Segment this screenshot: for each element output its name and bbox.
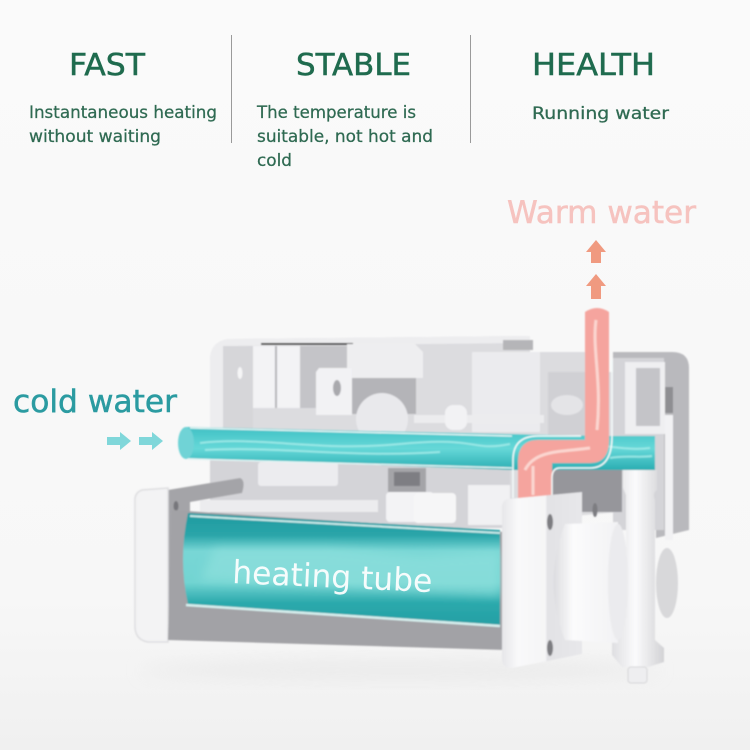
text: fast description: without waiting — [29, 127, 161, 147]
heading: FAST: FAST — [69, 48, 146, 83]
icon: warm water arrows — [586, 240, 606, 299]
right housing — [552, 352, 689, 540]
label: warm water: Warm water — [507, 195, 696, 231]
cylinder — [554, 522, 628, 643]
text: fast description — [29, 103, 217, 147]
text: stable description: suitable, not hot and — [257, 127, 433, 147]
text: fast description: Instantaneous heating — [29, 103, 217, 123]
icon: cold water arrows — [107, 432, 163, 450]
text: stable description: cold — [257, 151, 292, 171]
bracket: left — [135, 478, 244, 642]
heating tube — [168, 510, 505, 650]
cold water pipe — [178, 427, 655, 470]
column: FAST — [29, 48, 217, 147]
valve — [612, 470, 678, 683]
heading: HEALTH: HEALTH — [532, 48, 655, 83]
lower mid section — [200, 458, 510, 528]
upper housing — [210, 336, 640, 520]
column: HEALTH — [532, 48, 669, 124]
label: heating tube: heating tube — [232, 553, 433, 600]
front plate — [502, 492, 598, 668]
warm water pipe — [513, 308, 612, 498]
text: stable description — [256, 103, 433, 171]
text: stable description: The temperature is — [256, 103, 416, 123]
water heater product — [135, 308, 689, 683]
column: STABLE — [256, 48, 433, 171]
heading: STABLE: STABLE — [296, 48, 411, 83]
text: health description: Running water — [532, 104, 669, 124]
label: cold water: cold water — [13, 384, 177, 420]
